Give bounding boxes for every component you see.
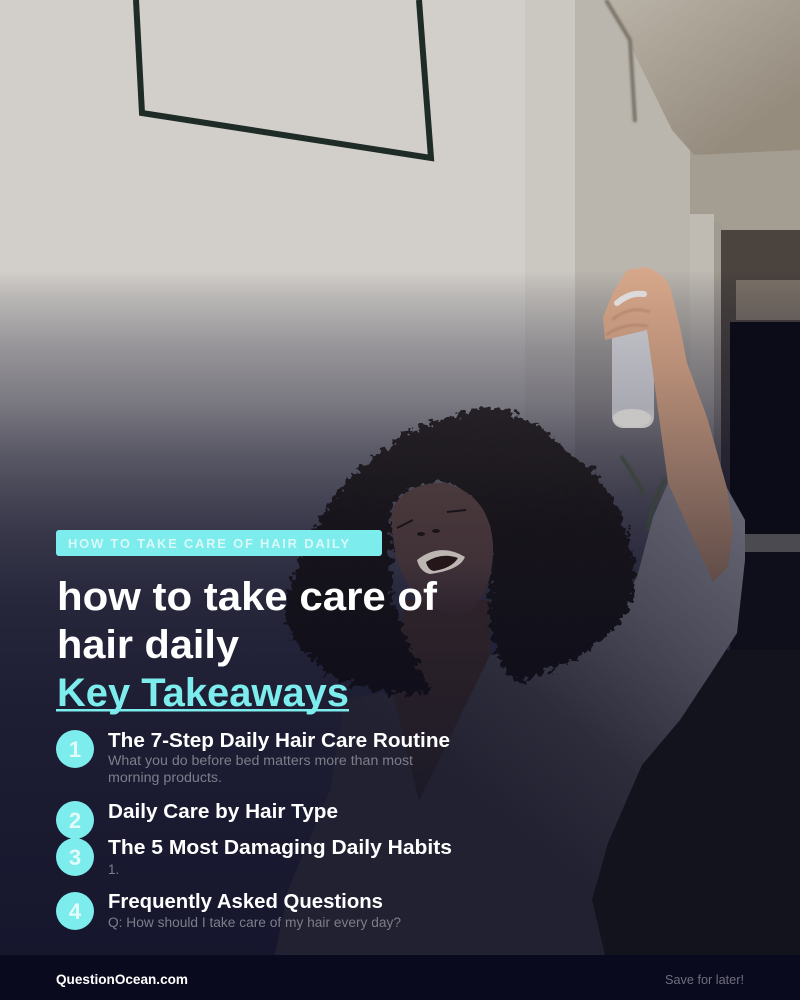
takeaway 4: 4 [69, 899, 82, 924]
gradient overlay [0, 270, 800, 1000]
category tag: HOW TO TAKE CARE OF HAIR DAILY [68, 536, 349, 551]
takeaway 3: 1. [108, 862, 119, 877]
site name: QuestionOcean.com [56, 971, 188, 987]
face [392, 483, 493, 614]
neck and chest [392, 600, 490, 801]
takeaway 4 [56, 891, 401, 930]
category tag [56, 530, 382, 556]
footer bar [0, 955, 800, 1000]
hair [285, 408, 635, 694]
takeaway 4: Frequently Asked Questions [108, 891, 383, 913]
takeaway 1 [56, 730, 450, 785]
takeaway 3: The 5 Most Damaging Daily Habits [108, 837, 452, 859]
dark doorway and plant background [585, 322, 800, 955]
photo subject: woman with spray bottle [275, 267, 745, 955]
title: hair daily [57, 623, 240, 667]
title [56, 575, 438, 715]
takeaway 2: 2 [69, 808, 81, 833]
takeaway 3: 3 [69, 845, 81, 870]
takeaway 1: What you do before bed matters more than most [108, 753, 413, 768]
plant leaves [621, 456, 666, 530]
takeaway 2: Daily Care by Hair Type [108, 801, 338, 823]
title: how to take care of [57, 575, 438, 619]
takeaway 1: morning products. [108, 770, 222, 785]
facial features [397, 510, 466, 574]
save prompt: Save for later! [665, 972, 744, 987]
spray cap [617, 294, 644, 303]
hand and arm [603, 267, 733, 582]
fingers [606, 310, 650, 335]
takeaway 3 [56, 837, 452, 877]
spray bottle [612, 325, 654, 428]
key takeaways heading: Key Takeaways [57, 671, 349, 715]
takeaway 2 [56, 801, 338, 839]
takeaway 1: 1 [69, 737, 81, 762]
robe [275, 483, 745, 955]
takeaway 1: The 7-Step Daily Hair Care Routine [108, 730, 450, 752]
takeaway 4: Q: How should I take care of my hair every day? [108, 915, 401, 930]
